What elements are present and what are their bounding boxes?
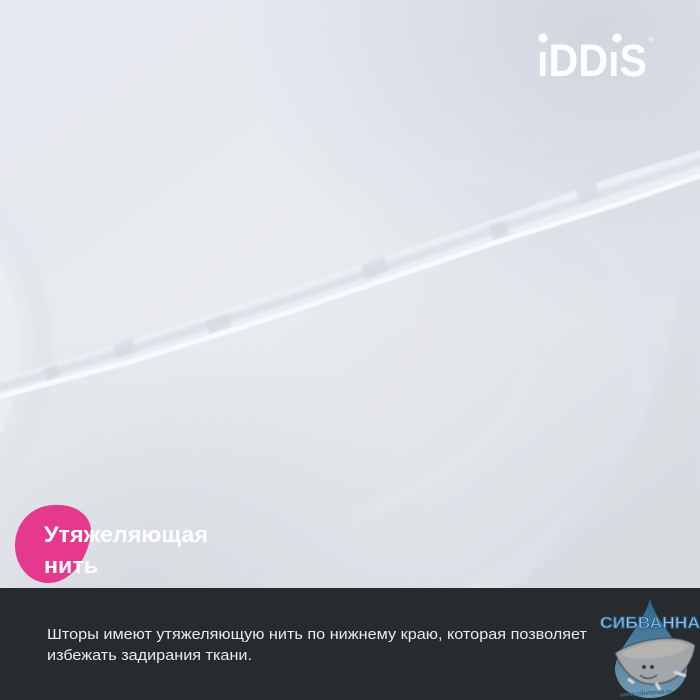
icon: water drop — [615, 598, 687, 698]
caption text: Шторы имеют утяжеляющую нить по нижнему краю, которая позволяет — [47, 626, 587, 643]
pink circle accent — [15, 505, 91, 583]
tube shading — [0, 161, 700, 388]
white stitched edge — [0, 175, 700, 397]
thread weights — [42, 183, 600, 381]
registered mark: ® — [648, 36, 654, 44]
heading: нить — [44, 553, 98, 578]
panel: dark caption band — [0, 588, 700, 700]
logo: IDDIS — [537, 33, 654, 86]
watermark name: СИБВАННА — [600, 615, 700, 632]
weighted thread hem — [0, 150, 700, 398]
logo wordmark: ıDDıS — [537, 35, 647, 86]
heading: Утяжеляющая — [44, 522, 208, 547]
watermark logo: СИБВАННА — [600, 598, 700, 699]
hem tube — [0, 150, 700, 398]
watermark url: www.sibvanna.ru — [619, 688, 672, 699]
caption text: избежать задирания ткани. — [47, 647, 252, 664]
icon: smiling bathtub — [615, 638, 695, 690]
logo dots — [538, 33, 622, 43]
